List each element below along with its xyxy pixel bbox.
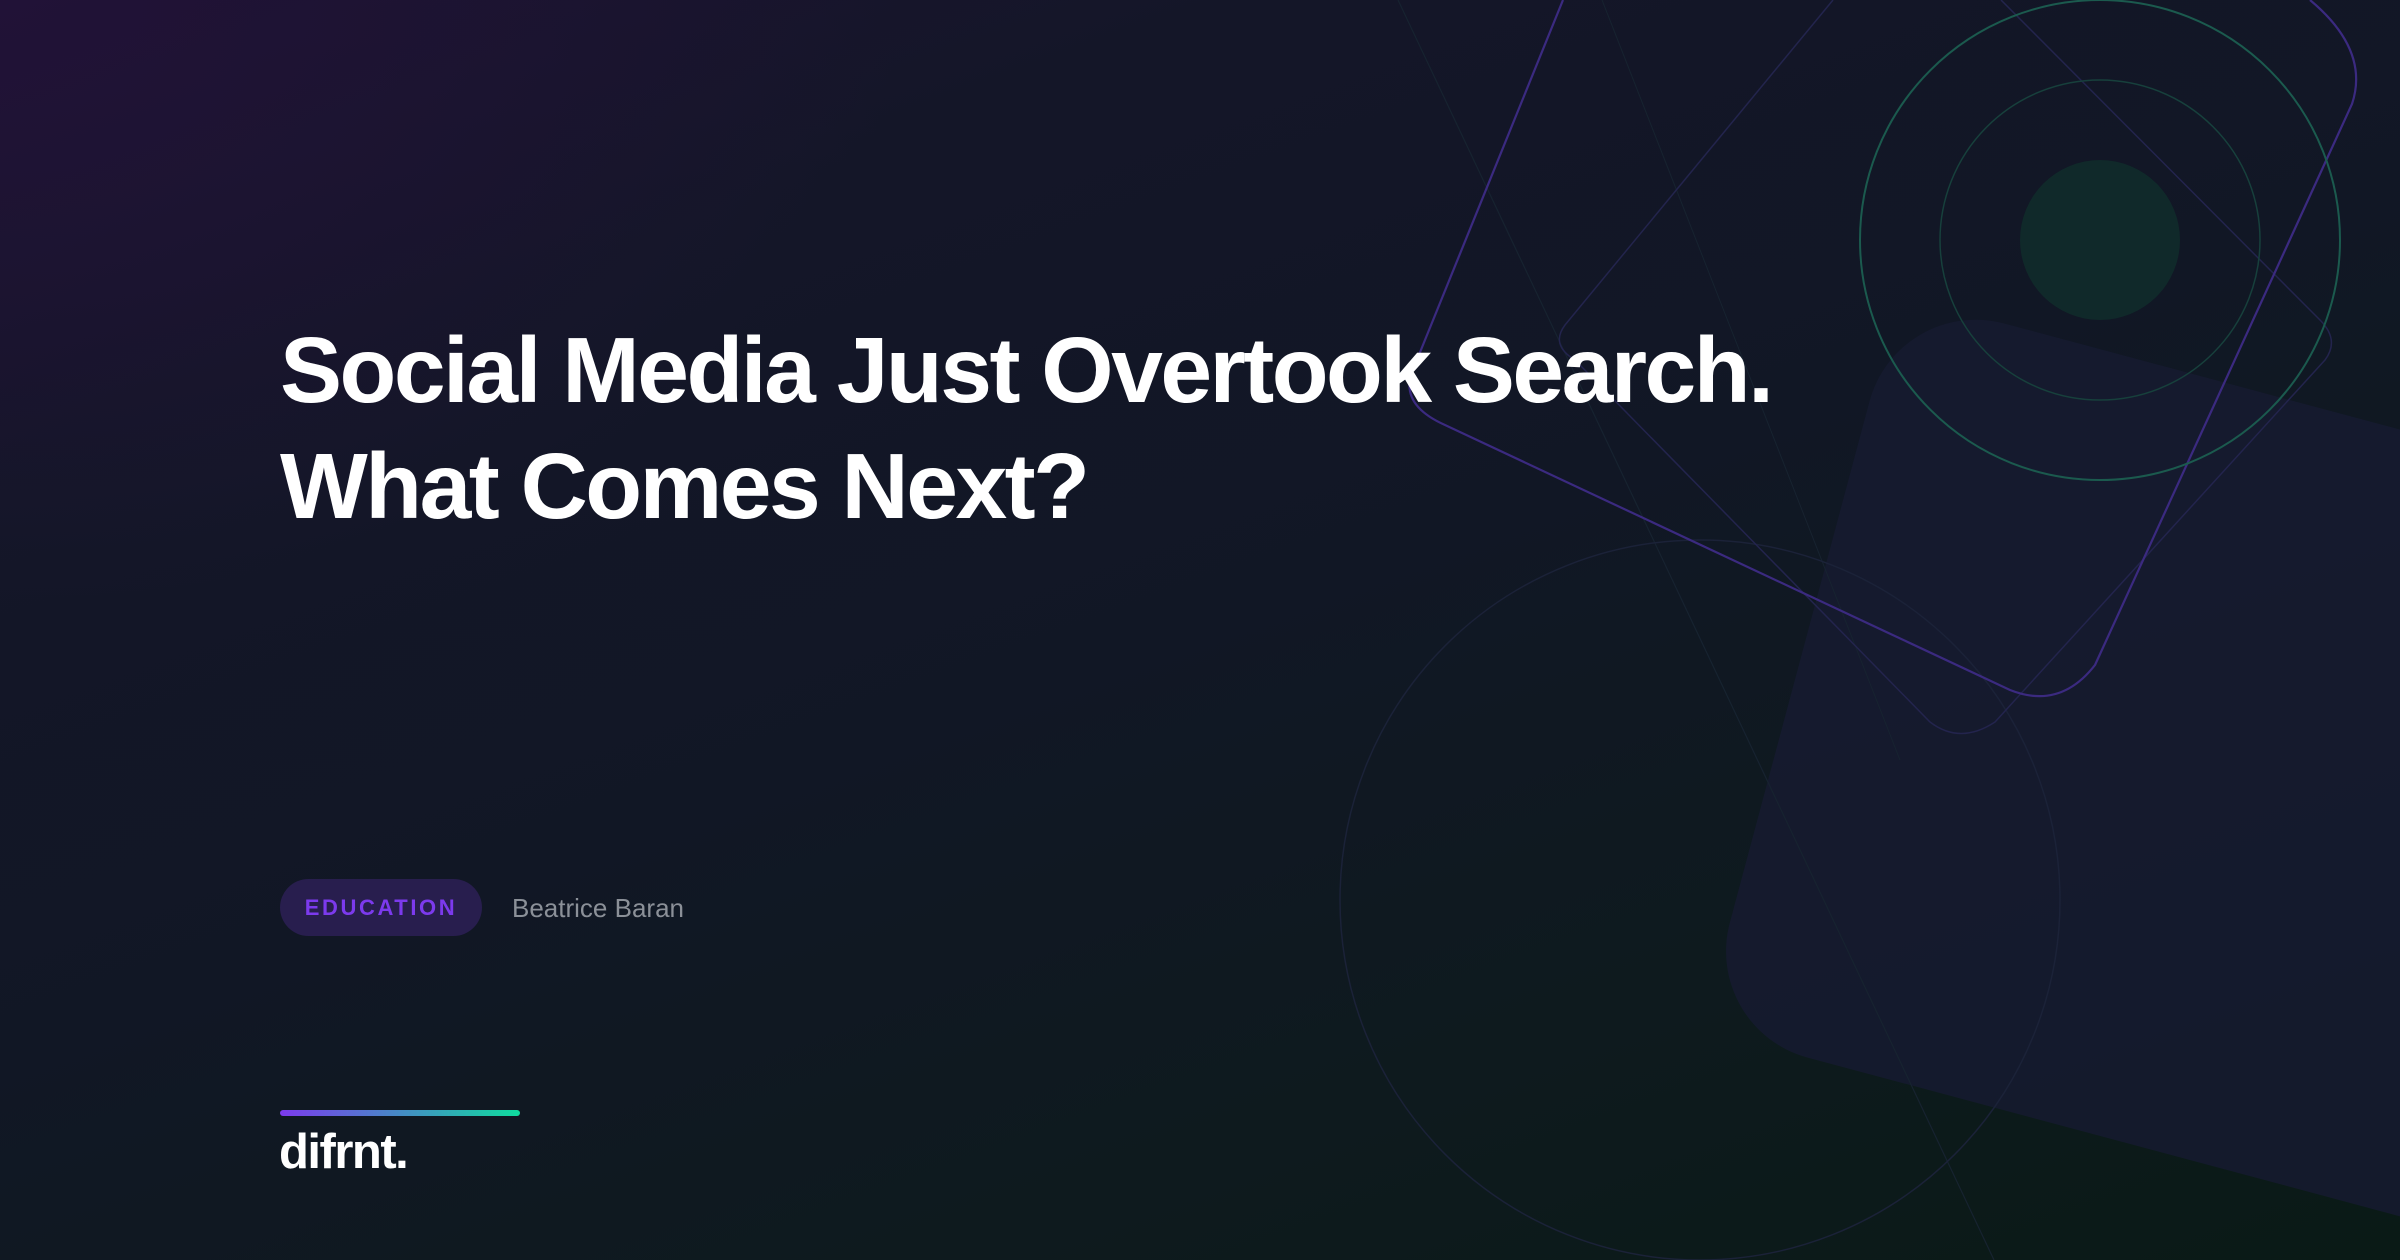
- faint diagonal lines: [1398, 0, 1994, 1260]
- big faint circle: [1340, 540, 2060, 1260]
- concentric circles: [1860, 0, 2340, 480]
- title: Social Media Just Overtook Search.: [280, 318, 1771, 422]
- logo: difrnt.: [279, 1125, 407, 1179]
- category badge: EDUCATION: [305, 895, 457, 920]
- gradient bar: [280, 1110, 520, 1116]
- purple tilted rounded outline: [1409, 0, 2356, 696]
- big tilted filled rectangle: [1701, 295, 2400, 1260]
- title: [280, 318, 1771, 538]
- title: What Comes Next?: [280, 434, 1087, 538]
- category badge: [280, 879, 482, 936]
- thin diamond outline: [1559, 0, 2331, 734]
- author: Beatrice Baran: [512, 893, 684, 923]
